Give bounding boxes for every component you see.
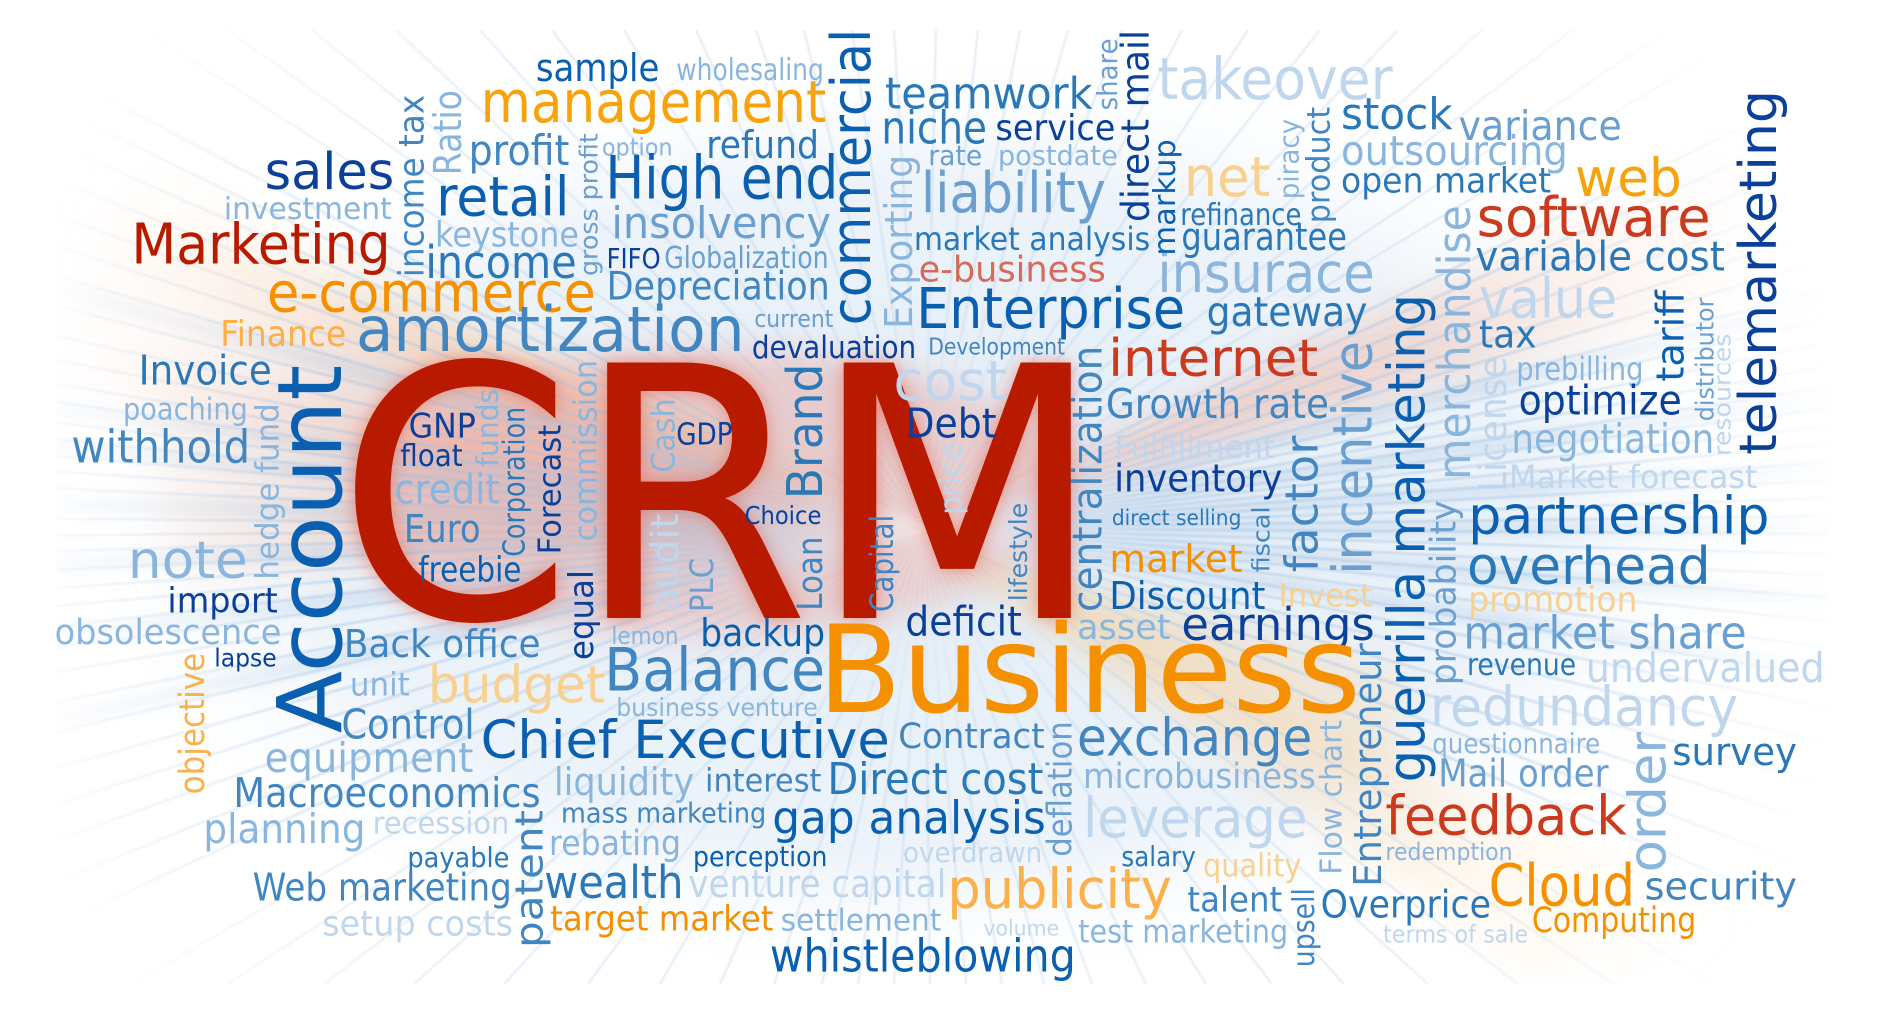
vertical words	[173, 29, 1789, 967]
word: PLC: PLC	[683, 558, 721, 612]
word: service: service	[995, 108, 1115, 149]
word: direct mail: direct mail	[1113, 30, 1158, 222]
word: float: float	[400, 439, 463, 474]
word: e-commerce: e-commerce	[267, 261, 596, 325]
word: unit: unit	[350, 665, 410, 703]
word: value: value	[1479, 267, 1617, 331]
word: factor: factor	[1276, 435, 1329, 572]
word: open market: open market	[1341, 162, 1551, 202]
word: optimize: optimize	[1519, 377, 1682, 425]
word: gap analysis: gap analysis	[772, 791, 1046, 844]
word: whistleblowing: whistleblowing	[770, 929, 1076, 982]
word: Account: Account	[259, 365, 362, 733]
word: earnings: earnings	[1181, 598, 1375, 651]
word: commercial: commercial	[820, 29, 883, 325]
word: sample: sample	[536, 46, 659, 91]
word: overhead: overhead	[1467, 537, 1711, 597]
word: lifestyle: lifestyle	[1004, 503, 1033, 601]
word: refinance: refinance	[1180, 198, 1301, 233]
word: Cloud: Cloud	[1489, 852, 1635, 919]
word: budget: budget	[428, 656, 605, 716]
word: quality: quality	[1203, 847, 1301, 885]
word: internet: internet	[1108, 329, 1318, 389]
word: Macroeconomics: Macroeconomics	[233, 769, 541, 817]
word: High end: High end	[605, 144, 838, 214]
word: GDP: GDP	[676, 418, 733, 453]
word: guarantee: guarantee	[1181, 215, 1347, 260]
word: upsell: upsell	[1287, 888, 1322, 967]
word: price: price	[934, 443, 969, 515]
word: patent: patent	[507, 810, 552, 948]
word: variable cost: variable cost	[1475, 233, 1725, 281]
word: Mail order: Mail order	[1438, 752, 1609, 797]
word: Depreciation: Depreciation	[607, 263, 830, 309]
word: Brand: Brand	[776, 364, 834, 499]
word: GNP: GNP	[409, 406, 476, 445]
word: investment: investment	[224, 192, 392, 227]
word: survey: survey	[1672, 730, 1797, 775]
word: fiscal: fiscal	[1248, 506, 1276, 572]
word: probability: probability	[1424, 500, 1465, 685]
word: Development: Development	[928, 335, 1065, 361]
word: cost: cost	[893, 350, 1007, 414]
word: note: note	[128, 531, 248, 591]
word: liability: liability	[921, 161, 1106, 226]
word: guerrilla marketing: guerrilla marketing	[1377, 294, 1437, 782]
word: test marketing: test marketing	[1078, 913, 1288, 951]
word: telemarketing: telemarketing	[1729, 90, 1789, 455]
word: target market: target market	[550, 900, 773, 940]
word: poaching: poaching	[123, 392, 248, 427]
word: gross profit: gross profit	[575, 133, 604, 276]
word: Loan: Loan	[791, 536, 831, 611]
word: deficit: deficit	[905, 597, 1022, 645]
word: incentive: incentive	[1322, 341, 1385, 575]
word: centralization: centralization	[1064, 346, 1112, 612]
word: asset: asset	[1077, 608, 1171, 648]
word: piracy: piracy	[1272, 119, 1305, 199]
word: Debt: Debt	[905, 399, 997, 447]
word: order: order	[1619, 731, 1679, 872]
word: current: current	[754, 305, 833, 333]
word: Computing: Computing	[1532, 901, 1696, 941]
word: software: software	[1477, 186, 1711, 249]
word: promotion: promotion	[1468, 580, 1637, 620]
word: Euro: Euro	[404, 507, 481, 552]
word: salary: salary	[1121, 840, 1196, 873]
word: business venture: business venture	[616, 693, 818, 722]
word: planning: planning	[203, 805, 365, 853]
word: import: import	[167, 582, 278, 622]
word: product: product	[1300, 107, 1338, 223]
word: wholesaling: wholesaling	[676, 53, 824, 88]
word: security: security	[1645, 864, 1797, 909]
word: terms of sale: terms of sale	[1383, 921, 1528, 949]
word: negotiation: negotiation	[1511, 415, 1714, 463]
word: Market forecast: Market forecast	[1509, 458, 1757, 496]
word: Back office: Back office	[344, 622, 541, 667]
word: teamwork: teamwork	[885, 70, 1093, 120]
word: freebie: freebie	[418, 550, 521, 590]
word: audit: audit	[643, 514, 688, 612]
word: stock: stock	[1341, 90, 1453, 140]
word: devaluation: devaluation	[752, 330, 916, 366]
word: wealth: wealth	[544, 856, 683, 909]
word: rate: rate	[928, 139, 982, 172]
word: prebilling: prebilling	[1516, 350, 1643, 388]
word: Corporation: Corporation	[497, 407, 532, 557]
word: postdate: postdate	[998, 139, 1118, 172]
word: Finance: Finance	[220, 314, 346, 355]
word: Entrepreneur: Entrepreneur	[1346, 643, 1391, 887]
word: Choice: Choice	[745, 501, 821, 530]
word: Exporting: Exporting	[877, 155, 922, 329]
word: Capital: Capital	[863, 515, 901, 612]
word: credit: credit	[394, 465, 500, 513]
word: resources: resources	[1708, 334, 1736, 456]
word: outsourcing: outsourcing	[1341, 127, 1568, 175]
word: net: net	[1184, 146, 1270, 210]
word: backup: backup	[700, 611, 825, 656]
word: microbusiness: microbusiness	[1083, 757, 1316, 797]
word: FIFO: FIFO	[607, 242, 661, 275]
word: publicity: publicity	[947, 858, 1172, 922]
word: hedge fund: hedge fund	[248, 403, 286, 580]
word: variance: variance	[1459, 102, 1622, 150]
word: equipment: equipment	[265, 734, 473, 782]
word: undervalued: undervalued	[1586, 644, 1825, 692]
word: setup costs: setup costs	[322, 904, 513, 944]
word: Web marketing: Web marketing	[253, 866, 512, 911]
word: niche: niche	[881, 101, 987, 154]
word: tax: tax	[1479, 312, 1537, 357]
word: funds: funds	[471, 389, 506, 467]
word: tariff: tariff	[1649, 289, 1694, 382]
word: Cash: Cash	[644, 398, 682, 473]
word: recession: recession	[373, 806, 509, 841]
word: market: market	[1109, 537, 1243, 582]
word: overdrawn: overdrawn	[903, 836, 1042, 869]
word: exchange: exchange	[1077, 708, 1312, 768]
word: refund: refund	[706, 123, 819, 168]
word: markup: markup	[1148, 139, 1183, 256]
word: gateway: gateway	[1207, 288, 1367, 336]
word: Contract: Contract	[898, 717, 1045, 757]
word: Enterprise: Enterprise	[916, 277, 1185, 342]
word: lapse: lapse	[214, 644, 277, 673]
word: redemption: redemption	[1385, 838, 1513, 866]
word: revenue: revenue	[1467, 648, 1576, 683]
word: insurace: insurace	[1157, 242, 1375, 306]
word: e-business: e-business	[919, 249, 1106, 290]
word: objective: objective	[173, 653, 213, 794]
word: share: share	[1091, 38, 1124, 110]
word: talent: talent	[1187, 880, 1282, 920]
word: option: option	[602, 133, 673, 161]
word: venture capital: venture capital	[688, 862, 946, 907]
word: questionnaire: questionnaire	[1432, 727, 1600, 760]
word: rebating: rebating	[549, 824, 681, 864]
word: Business: Business	[817, 599, 1361, 741]
word: insolvency: insolvency	[611, 199, 831, 249]
word: License: License	[1471, 356, 1516, 492]
word: liquidity: liquidity	[554, 760, 694, 805]
word: merchandise: merchandise	[1428, 205, 1481, 480]
word: leverage: leverage	[1083, 787, 1307, 851]
word: management: management	[481, 69, 826, 136]
word: profit: profit	[469, 126, 569, 175]
word: Invoice: Invoice	[139, 347, 272, 395]
word: Marketing: Marketing	[131, 212, 391, 277]
word: partnership: partnership	[1468, 486, 1769, 546]
word: amortization: amortization	[356, 293, 745, 366]
word: Invest: Invest	[1279, 577, 1372, 615]
word: income tax: income tax	[393, 95, 433, 277]
word: web: web	[1575, 148, 1682, 209]
word: Flow chart: Flow chart	[1315, 720, 1350, 875]
word: Discount: Discount	[1109, 574, 1265, 619]
word: income: income	[425, 236, 577, 289]
word: Control: Control	[341, 701, 475, 749]
word: interest: interest	[705, 761, 821, 799]
word: lemon: lemon	[611, 622, 679, 650]
word: volume: volume	[983, 916, 1059, 941]
word: Growth rate: Growth rate	[1106, 380, 1329, 428]
word: Direct cost: Direct cost	[827, 755, 1043, 805]
word: withhold: withhold	[71, 421, 250, 474]
word: settlement: settlement	[781, 904, 942, 939]
word: commission: commission	[566, 360, 604, 541]
word: payable: payable	[407, 841, 509, 874]
title: CRM: CRM	[336, 293, 1104, 701]
word: Fulfillment: Fulfillment	[1114, 428, 1275, 466]
word: inventory: inventory	[1114, 456, 1282, 501]
word: equal: equal	[562, 570, 601, 660]
word: redundancy: redundancy	[1430, 675, 1738, 738]
word: distributor: distributor	[1691, 297, 1720, 421]
word: Forecast: Forecast	[532, 425, 568, 554]
word: direct selling: direct selling	[1112, 506, 1241, 531]
word: market analysis: market analysis	[914, 220, 1150, 258]
word: sales: sales	[265, 142, 394, 201]
word: keystone: keystone	[435, 216, 579, 256]
word: obsolescence: obsolescence	[55, 613, 281, 653]
word: deflation: deflation	[1041, 721, 1080, 857]
word: feedback: feedback	[1385, 785, 1627, 848]
word: Chief Executive: Chief Executive	[481, 710, 890, 771]
word: takeover: takeover	[1157, 46, 1393, 113]
word: Balance: Balance	[604, 636, 825, 706]
word: Ratio: Ratio	[426, 90, 471, 175]
word: Overprice: Overprice	[1321, 882, 1491, 927]
word: retail: retail	[436, 165, 569, 228]
word: market share: market share	[1463, 607, 1747, 660]
word: Globalization: Globalization	[664, 241, 829, 276]
word: mass marketing: mass marketing	[561, 797, 766, 830]
word: perception: perception	[693, 840, 827, 873]
